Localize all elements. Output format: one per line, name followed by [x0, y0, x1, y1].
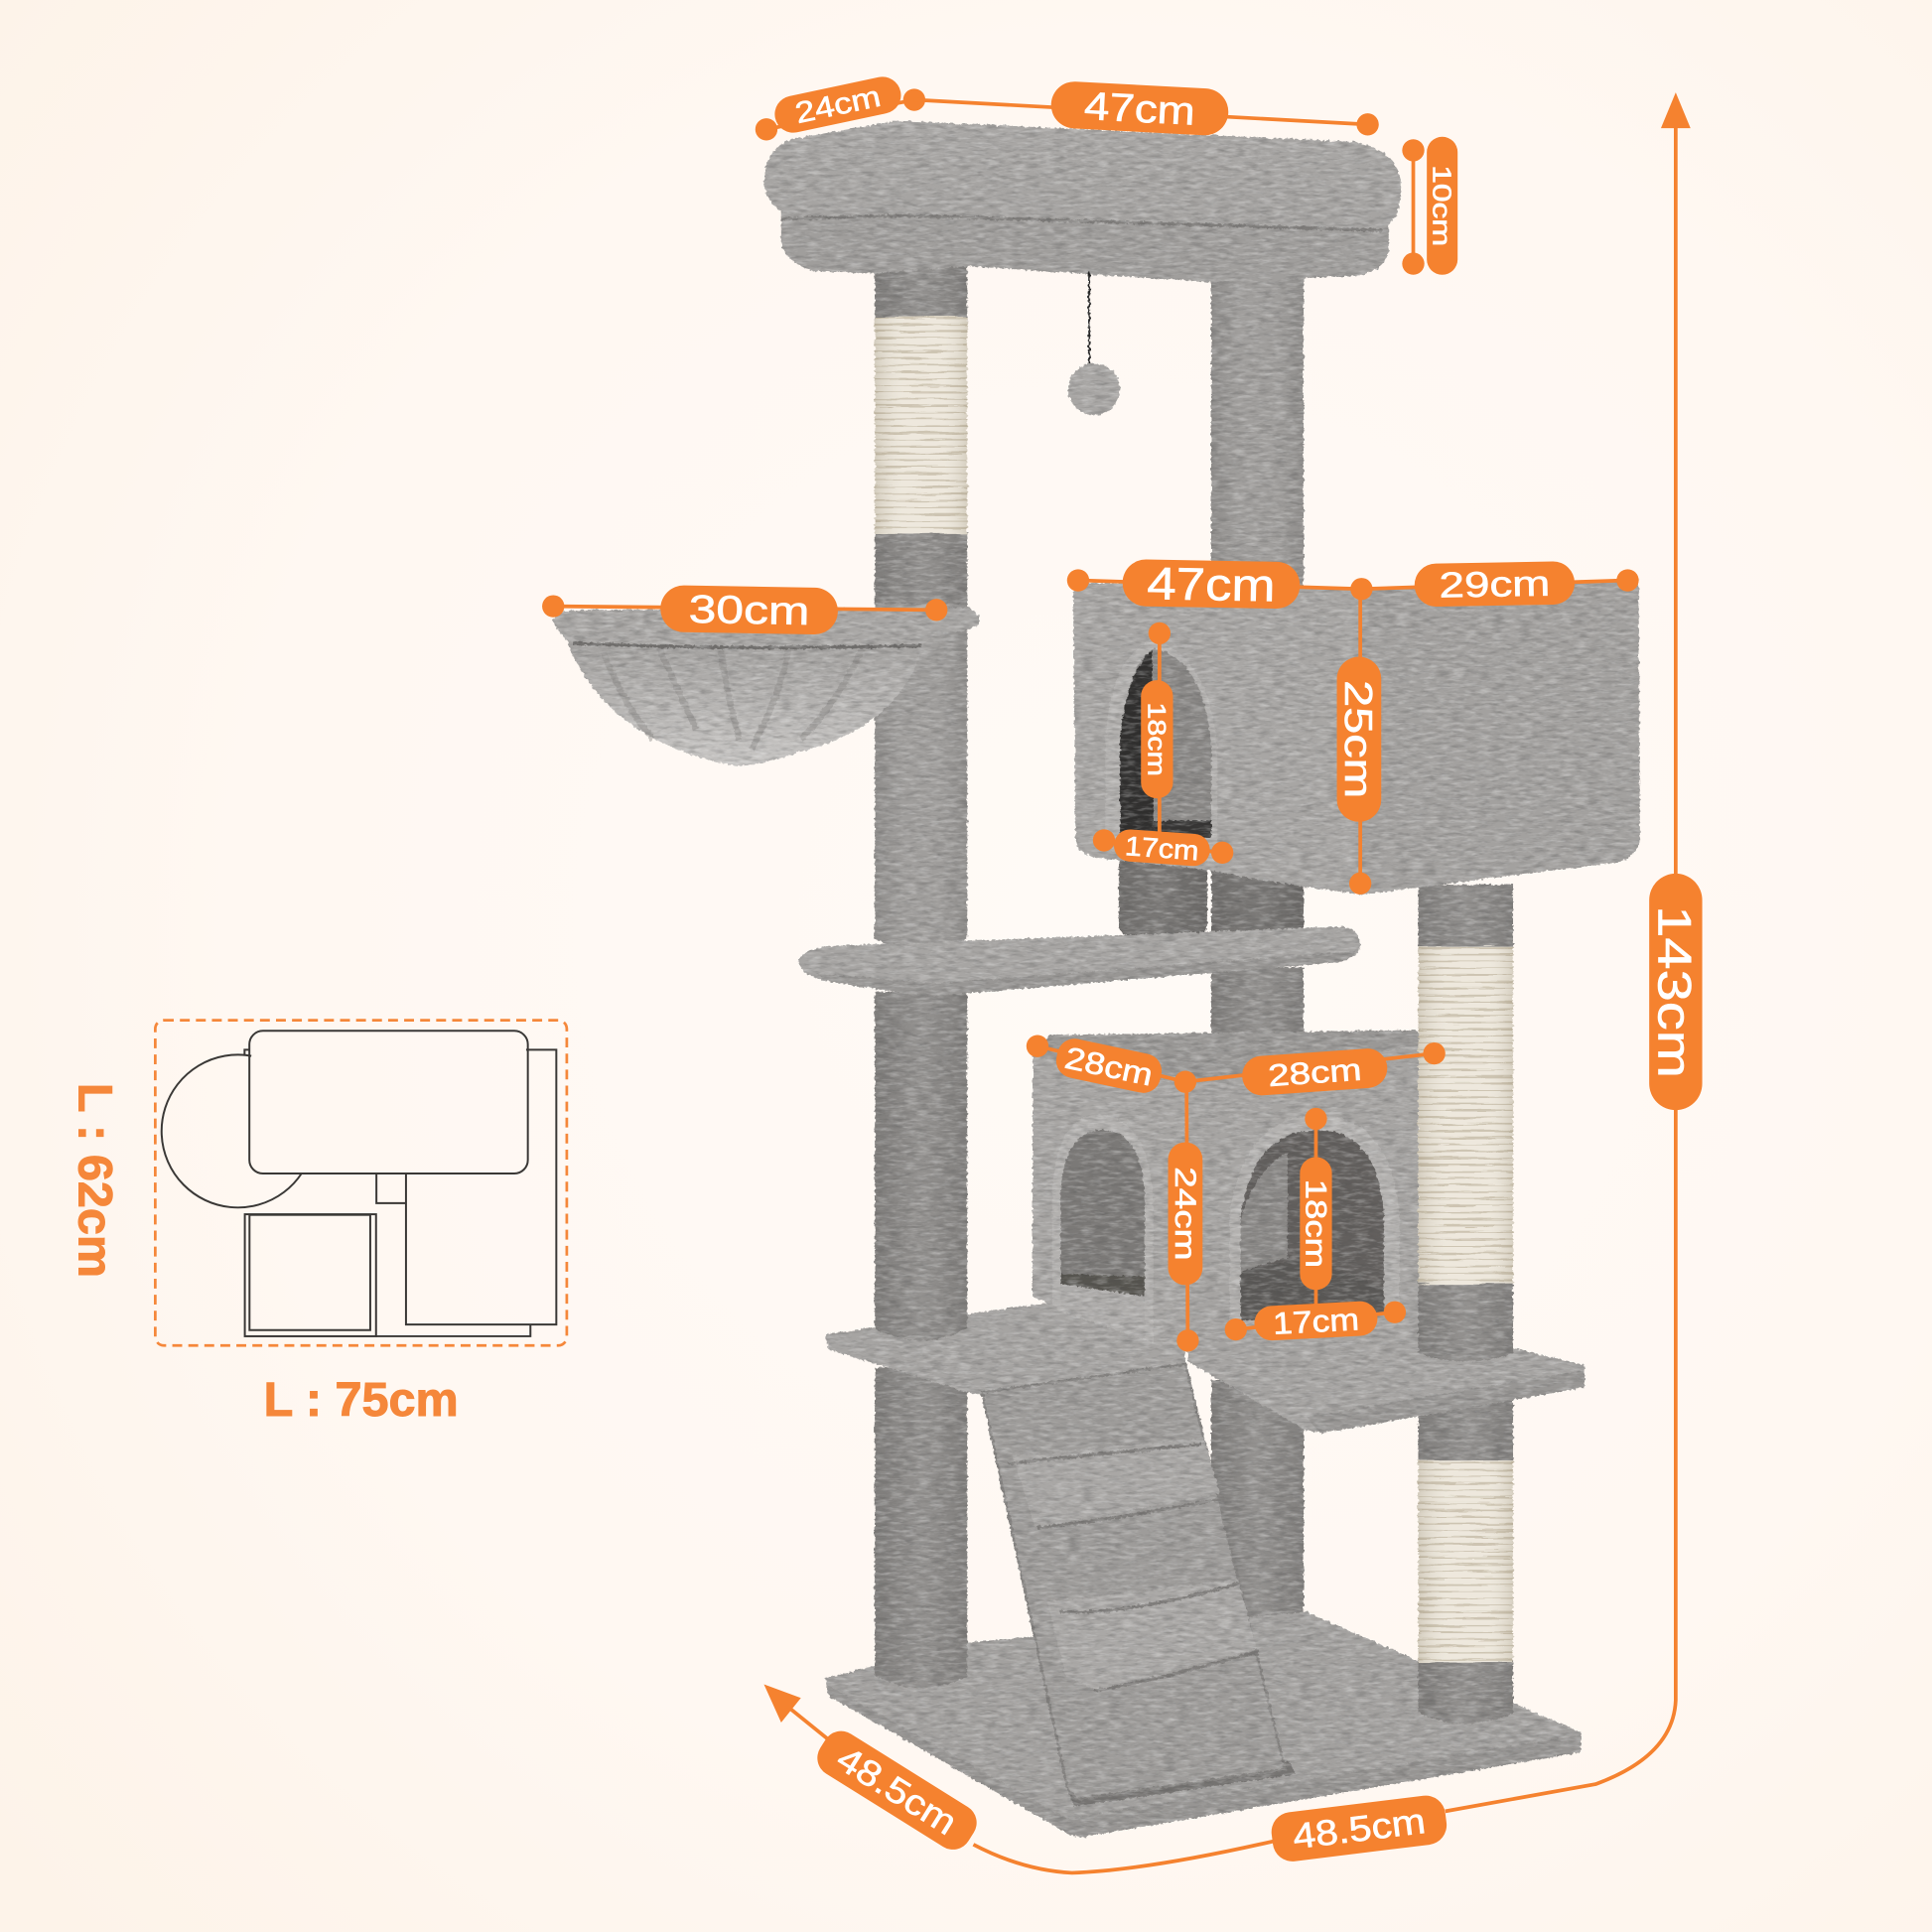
back post — [1211, 269, 1304, 1629]
dimension: lower door height 18cm — [1300, 1108, 1332, 1309]
footprint width label: L : 75cm — [264, 1373, 459, 1427]
lower box — [1033, 1031, 1430, 1353]
dimension: lower door width 17cm — [1225, 1301, 1406, 1342]
dimension: upper box depth 29cm — [1361, 561, 1639, 607]
dimension: top platform height 10cm — [1402, 137, 1457, 275]
dimension: upper door height 18cm: 18cm — [1143, 702, 1170, 776]
short post under upper box — [1119, 857, 1207, 935]
floor plan panel — [68, 1021, 567, 1345]
floor plan outline drawing — [162, 1031, 556, 1336]
right post upper gray sections — [1418, 885, 1513, 1361]
dimension: base width 48.5cm: 48.5cm — [1291, 1800, 1428, 1857]
top platform seam — [781, 215, 1382, 230]
right post lower gray sections — [1418, 1399, 1513, 1724]
dimension: base depth 48.5cm arrow — [763, 1685, 984, 1857]
left post lower section — [875, 1368, 967, 1688]
dimension: upper box width 47cm — [1067, 557, 1361, 612]
dimension: top platform depth 24cm: 24cm — [792, 80, 884, 130]
dimension: lower box width 28cm: 28cm — [1267, 1052, 1363, 1093]
cat tree product — [553, 121, 1640, 1837]
dimension: lower box height 24cm — [1169, 1070, 1202, 1351]
left post middle section — [875, 992, 967, 1340]
lower shelf left — [826, 1294, 1185, 1395]
dimension: base width 48.5cm — [973, 1793, 1449, 1872]
ramp — [982, 1364, 1297, 1806]
dimension: top platform depth 24cm — [756, 73, 925, 140]
footprint depth label: L : 62cm — [68, 1083, 121, 1278]
dimension: lower box width 28cm — [1185, 1042, 1446, 1097]
dimension: lower box depth 28cm: 28cm — [1061, 1040, 1156, 1093]
sisal rope sections — [875, 317, 1513, 1662]
footprint dashed frame — [155, 1021, 567, 1345]
dangling ball toy — [1068, 271, 1120, 415]
dimension: base depth 48.5cm arrow: 48.5cm — [830, 1737, 964, 1843]
dimension: lower box depth 28cm — [1027, 1035, 1185, 1096]
dimension: lower door width 17cm: 17cm — [1272, 1302, 1360, 1341]
lower shelf right — [1187, 1307, 1585, 1433]
dimension: total height 143cm arrow — [1446, 92, 1703, 1811]
dimension: hammock 30cm: 30cm — [688, 588, 810, 633]
base board — [826, 1611, 1581, 1837]
dimension: lower box height 24cm: 24cm — [1169, 1167, 1201, 1261]
left post upper sections — [875, 265, 967, 951]
top platform upper cushion — [763, 121, 1401, 229]
dimension: top platform width 47cm — [914, 80, 1379, 136]
hammock — [553, 608, 980, 765]
dimension: upper door height 18cm — [1141, 622, 1173, 835]
dimension: total height 143cm arrow: 143cm — [1648, 905, 1701, 1078]
dimension: lower door height 18cm: 18cm — [1300, 1179, 1332, 1268]
dimension: upper door width 17cm: 17cm — [1124, 830, 1200, 866]
top platform lower cushion — [781, 209, 1389, 282]
dimension: upper box height 25cm — [1336, 578, 1381, 895]
upper box arch opening — [1105, 640, 1217, 863]
dimension: hammock 30cm — [542, 585, 947, 634]
lower box left arch — [1052, 1115, 1154, 1343]
middle shelf — [798, 926, 1360, 996]
dimension: top platform width 47cm: 47cm — [1083, 84, 1196, 134]
dimension: top platform height 10cm: 10cm — [1427, 165, 1456, 246]
dimension: upper box depth 29cm: 29cm — [1439, 563, 1551, 606]
dimension: upper box width 47cm: 47cm — [1147, 557, 1276, 612]
dimension: upper box height 25cm: 25cm — [1336, 680, 1379, 798]
upper box — [1073, 579, 1640, 895]
lower box right arch — [1230, 1115, 1400, 1333]
dimension: upper door width 17cm — [1093, 828, 1233, 867]
